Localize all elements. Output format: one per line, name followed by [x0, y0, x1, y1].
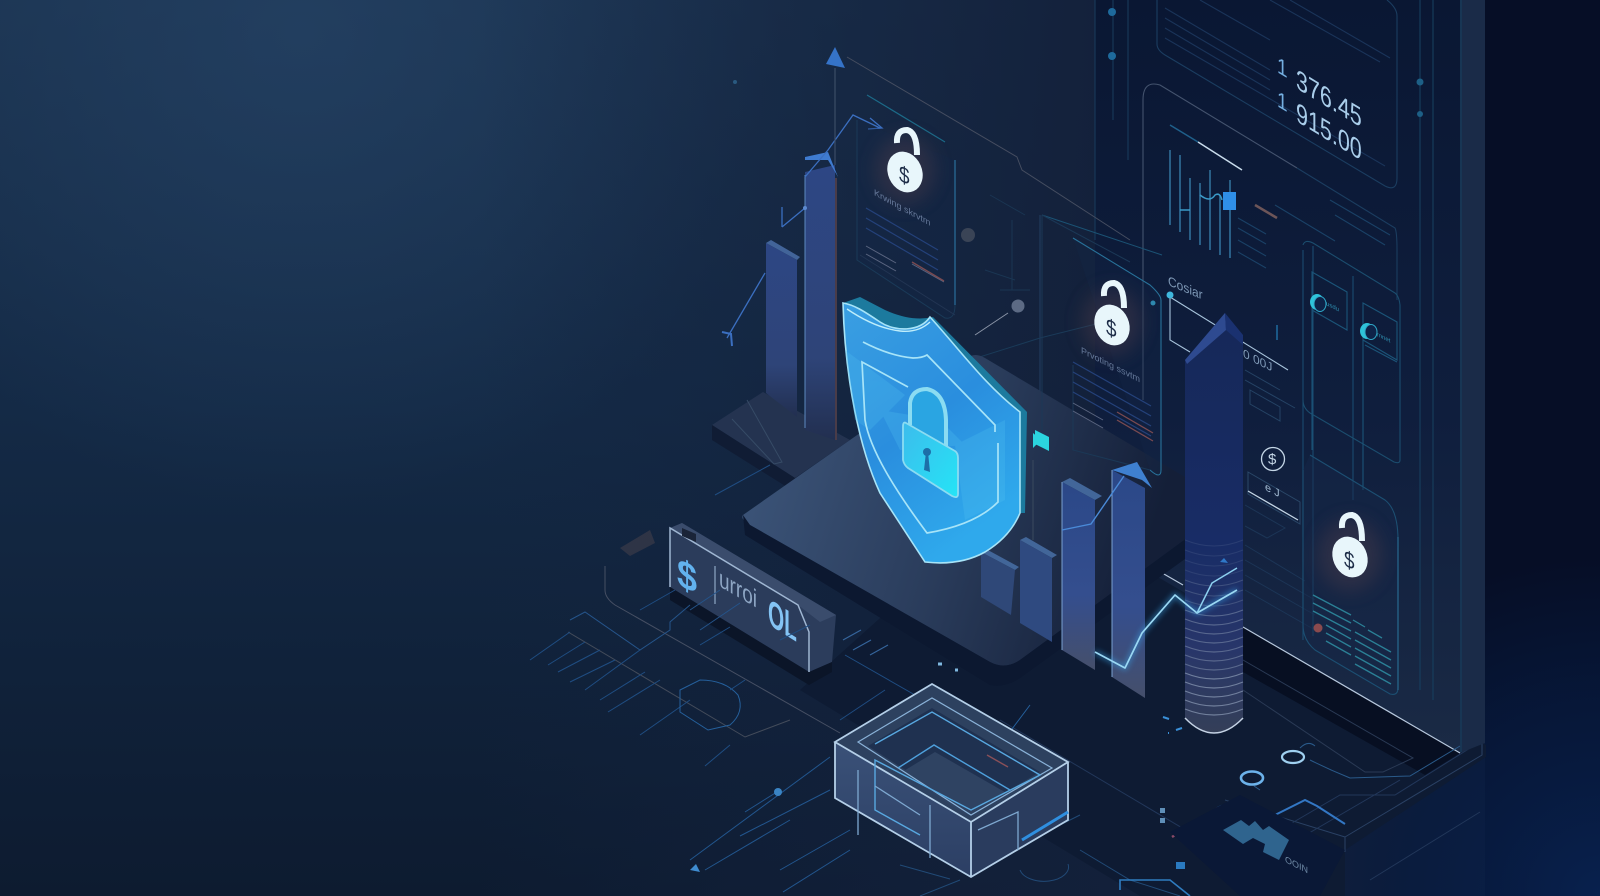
central platform	[742, 355, 1232, 686]
panel: top account card	[1157, 0, 1397, 188]
panel: chart card	[1143, 84, 1397, 630]
text rows	[1073, 362, 1151, 436]
ring: upper	[1282, 751, 1304, 763]
amount values: 1	[1277, 52, 1288, 83]
plate divider	[714, 566, 716, 604]
mini label A: usdu	[1326, 300, 1339, 314]
box: wireframe enclosure	[835, 684, 1068, 877]
icon: lock with dollar	[875, 130, 935, 204]
panel: right mini cards	[1303, 241, 1400, 640]
name plate	[620, 523, 836, 685]
tower rings	[1185, 540, 1243, 733]
icon: lock with dollar: $	[899, 160, 910, 190]
line chart: glowing trend	[1095, 558, 1237, 668]
bar: medium	[1062, 478, 1102, 670]
decorative rings	[1160, 717, 1460, 869]
icon: lock with dollar: $	[1106, 313, 1117, 343]
text rows	[1313, 595, 1391, 684]
amount values	[1277, 52, 1362, 167]
shield	[843, 297, 1027, 563]
panel: security card 2	[1042, 215, 1161, 475]
icon: coin circle	[1262, 448, 1284, 470]
red marker	[1314, 624, 1322, 632]
bar chart: back left bars	[722, 47, 882, 440]
icon: lock with dollar	[1318, 515, 1382, 591]
back connector lines	[733, 57, 1162, 494]
bar: short	[1020, 537, 1057, 642]
tower chart	[1185, 313, 1243, 733]
bar: tall	[1112, 462, 1152, 698]
small box	[1245, 472, 1315, 630]
card caption: Krwing skrvtm	[874, 188, 930, 229]
amount values: 376.45	[1296, 63, 1362, 134]
icon: lock with dollar	[1082, 283, 1142, 356]
star marker	[1033, 430, 1049, 540]
label: courier: Cosiar	[1168, 273, 1203, 303]
amount values: 915.00	[1296, 96, 1362, 167]
icon: teal toggle B	[1360, 323, 1377, 340]
icon: coin circle: $	[1268, 451, 1277, 468]
ring: lower	[1241, 772, 1263, 784]
plate name: urroi	[719, 564, 757, 613]
bar: right	[805, 152, 838, 440]
icon: lock with dollar: $	[1344, 545, 1355, 575]
logo caption: OOIN	[1285, 854, 1308, 876]
text rows	[866, 208, 938, 270]
bar: shortest	[981, 549, 1019, 615]
panel: security card 3	[1303, 455, 1398, 694]
bar: left	[766, 240, 800, 417]
mini label B: mnet	[1377, 331, 1391, 345]
arrow: rising trend line	[722, 115, 882, 346]
panel: security card 1	[857, 95, 955, 318]
small value: 0 00J	[1243, 346, 1272, 375]
card caption: Prvoting ssvtm	[1081, 345, 1140, 385]
panel: tall dashboard wall	[1095, 0, 1485, 775]
dollar sign: $	[677, 550, 697, 603]
circuit traces: left floor	[530, 465, 1190, 896]
wall base shadow	[1243, 627, 1460, 775]
candlestick chart	[1170, 125, 1390, 268]
small chart bars	[981, 462, 1152, 698]
arrow: trend	[1062, 476, 1124, 530]
floor logo block	[1170, 795, 1345, 896]
floor platform	[800, 470, 1486, 896]
amount values: 1	[1277, 86, 1288, 117]
left chart base	[712, 392, 850, 492]
shield inner outline	[862, 342, 998, 533]
line chart box	[1166, 292, 1288, 370]
plate value: OL	[768, 590, 797, 650]
icon: teal toggle A	[1310, 294, 1326, 312]
arrow: up arrow	[826, 47, 845, 165]
small box: e J	[1265, 481, 1280, 500]
shield facets	[845, 350, 1005, 520]
icon: padlock	[903, 389, 958, 497]
